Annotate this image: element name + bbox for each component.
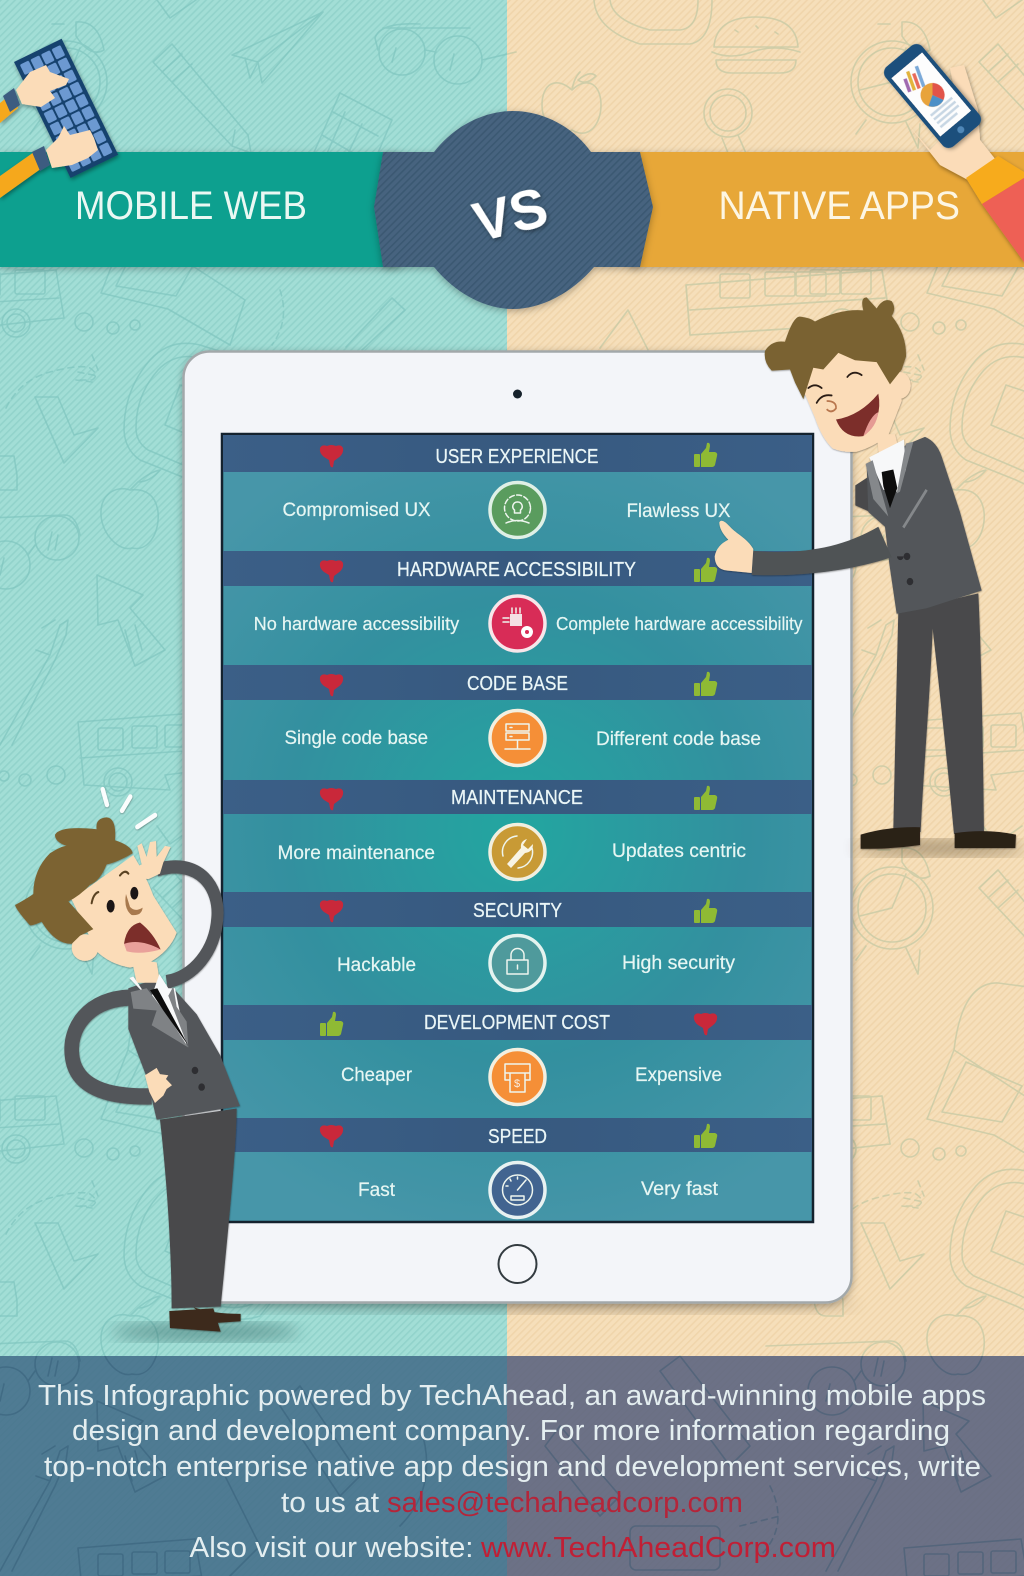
upper hand and sleeve <box>0 65 69 123</box>
left value: Compromised UX <box>282 500 431 521</box>
row title: MAINTENANCE <box>451 787 583 809</box>
row title: HARDWARE ACCESSIBILITY <box>397 559 636 581</box>
neck <box>132 959 160 983</box>
keyboard <box>14 39 118 178</box>
left value: Cheaper <box>341 1065 413 1086</box>
pointing arm <box>752 527 892 575</box>
icon: thumbs up <box>694 443 717 467</box>
lapels <box>866 442 913 516</box>
icon: hand holding phone <box>877 38 1024 262</box>
right value: Complete hardware accessibility <box>556 614 802 634</box>
arm and sleeve <box>906 65 1024 262</box>
ear <box>888 372 911 399</box>
phone screen chart <box>903 66 945 107</box>
character: worried man (left) <box>15 789 300 1341</box>
hand on hip <box>145 1068 172 1103</box>
VS text: VS <box>467 175 554 254</box>
icon circle: server <box>490 710 545 766</box>
background: teal left half <box>0 0 507 1576</box>
icon circle: speedometer <box>490 1162 545 1218</box>
nose <box>827 401 836 411</box>
bent arm <box>72 998 152 1096</box>
header band <box>0 111 1024 309</box>
footer text: This Infographic powered by TechAhead, an award-winning mobile apps <box>38 1380 986 1412</box>
right value: High security <box>622 953 736 974</box>
face <box>72 855 177 968</box>
VS badge <box>374 111 653 309</box>
buttons <box>192 1067 205 1091</box>
jacket <box>867 437 982 614</box>
footer text: design and development company. For more information regarding <box>72 1415 950 1447</box>
phone <box>877 38 988 155</box>
row title: DEVELOPMENT COST <box>424 1012 610 1034</box>
icon: thumbs down <box>694 1013 717 1035</box>
tongue <box>124 942 161 953</box>
home button <box>498 1245 536 1283</box>
icon: thumbs up <box>694 786 717 810</box>
left value: Fast <box>358 1180 396 1201</box>
right value: Very fast <box>641 1179 719 1200</box>
icon circle: padlock <box>490 936 545 990</box>
icon circle: chip <box>490 596 545 651</box>
face <box>800 334 902 452</box>
camera <box>513 390 522 398</box>
arm behind tablet <box>855 477 887 519</box>
icon: thumbs up <box>694 1124 717 1148</box>
left value: Hackable <box>337 955 416 976</box>
row: development cost <box>223 1005 812 1104</box>
icon: thumbs up <box>320 1012 343 1036</box>
row title: SECURITY <box>473 900 562 922</box>
trousers <box>893 593 984 834</box>
ear <box>72 934 98 961</box>
mouth <box>836 394 879 436</box>
band title: native apps: NATIVE APPS <box>718 184 960 228</box>
neck <box>877 434 900 464</box>
doodle pattern left <box>0 0 507 1356</box>
row: user experience <box>223 435 812 538</box>
icon: thumbs down <box>320 1125 343 1147</box>
buttons <box>897 553 913 585</box>
icon: hands on keyboard <box>0 39 118 198</box>
icon: thumbs up <box>694 558 717 582</box>
eyes <box>808 373 862 403</box>
icon: thumbs up <box>694 899 717 923</box>
band: mobile web <box>0 152 400 267</box>
row title: CODE BASE <box>467 673 568 695</box>
icon: thumbs down <box>320 445 343 467</box>
pocket <box>903 490 927 528</box>
trousers <box>160 1109 237 1308</box>
right value: Different code base <box>596 729 761 750</box>
left value: Single code base <box>284 728 428 749</box>
right value: Updates centric <box>612 841 746 862</box>
left value: No hardware accessibility <box>254 614 459 634</box>
nose <box>125 894 143 915</box>
eyes and eyebrows <box>92 872 138 912</box>
lower hand and sleeve <box>0 126 98 198</box>
doodle pattern right <box>507 0 1024 1356</box>
left value: More maintenance <box>278 843 435 864</box>
raised hand <box>130 841 171 879</box>
pointing hand <box>715 521 753 573</box>
hair <box>15 817 133 944</box>
tongue <box>863 412 878 436</box>
row title: SPEED <box>488 1126 547 1148</box>
footer text: to us at <box>281 1487 379 1519</box>
shoes <box>861 827 1016 849</box>
tablet body <box>184 352 852 1302</box>
footer text <box>38 1380 986 1564</box>
comparison table <box>223 435 812 1218</box>
shoes <box>169 1307 241 1332</box>
icon: thumbs down <box>320 900 343 922</box>
footer panel <box>0 1356 1024 1576</box>
icon circle: gear <box>490 482 545 538</box>
footer text: Also visit our website: <box>190 1532 474 1564</box>
shirt collar <box>869 439 906 492</box>
top arm <box>157 867 218 982</box>
footer text: www.TechAheadCorp.com <box>480 1532 836 1564</box>
row: code base <box>223 665 812 766</box>
surprise marks <box>103 789 155 827</box>
tablet <box>180 352 860 1313</box>
ground shadow <box>110 1323 300 1341</box>
tie <box>150 988 188 1046</box>
footer text: top-notch enterprise native app design and development services, write <box>44 1451 981 1483</box>
icon: thumbs down <box>320 788 343 810</box>
icon circle: wrench <box>490 824 545 880</box>
mouth <box>124 922 161 949</box>
band title: mobile web: MOBILE WEB <box>75 184 307 228</box>
footer text: sales@techaheadcorp.com <box>387 1487 743 1519</box>
ground shadow <box>180 1297 860 1313</box>
icon: thumbs down <box>320 560 343 582</box>
lapels <box>131 986 188 1048</box>
footer left tint <box>0 1356 507 1576</box>
character: happy man (right) <box>715 297 1024 856</box>
ground shadow <box>855 840 1024 856</box>
tie <box>882 469 897 508</box>
row: speed <box>223 1118 812 1218</box>
band: native apps <box>630 152 1024 267</box>
row: maintenance <box>223 780 812 880</box>
background: tan right half <box>507 0 1024 1576</box>
row: hardware accessibility <box>223 551 812 651</box>
shirt collar <box>129 974 187 1046</box>
row title: USER EXPERIENCE <box>436 446 598 468</box>
hair <box>765 297 906 399</box>
right value: Flawless UX <box>626 501 731 522</box>
icon circle: printer with dollar: $ <box>514 1078 520 1090</box>
footer right tint <box>507 1356 1024 1576</box>
footer doodle overlay <box>0 1356 1024 1576</box>
jacket <box>128 981 240 1120</box>
icon circle: printer with dollar <box>490 1050 545 1104</box>
screen <box>222 434 813 1222</box>
row: security <box>223 892 812 990</box>
icon: thumbs down <box>320 674 343 696</box>
right value: Expensive <box>635 1065 722 1086</box>
icon: thumbs up <box>694 672 717 696</box>
